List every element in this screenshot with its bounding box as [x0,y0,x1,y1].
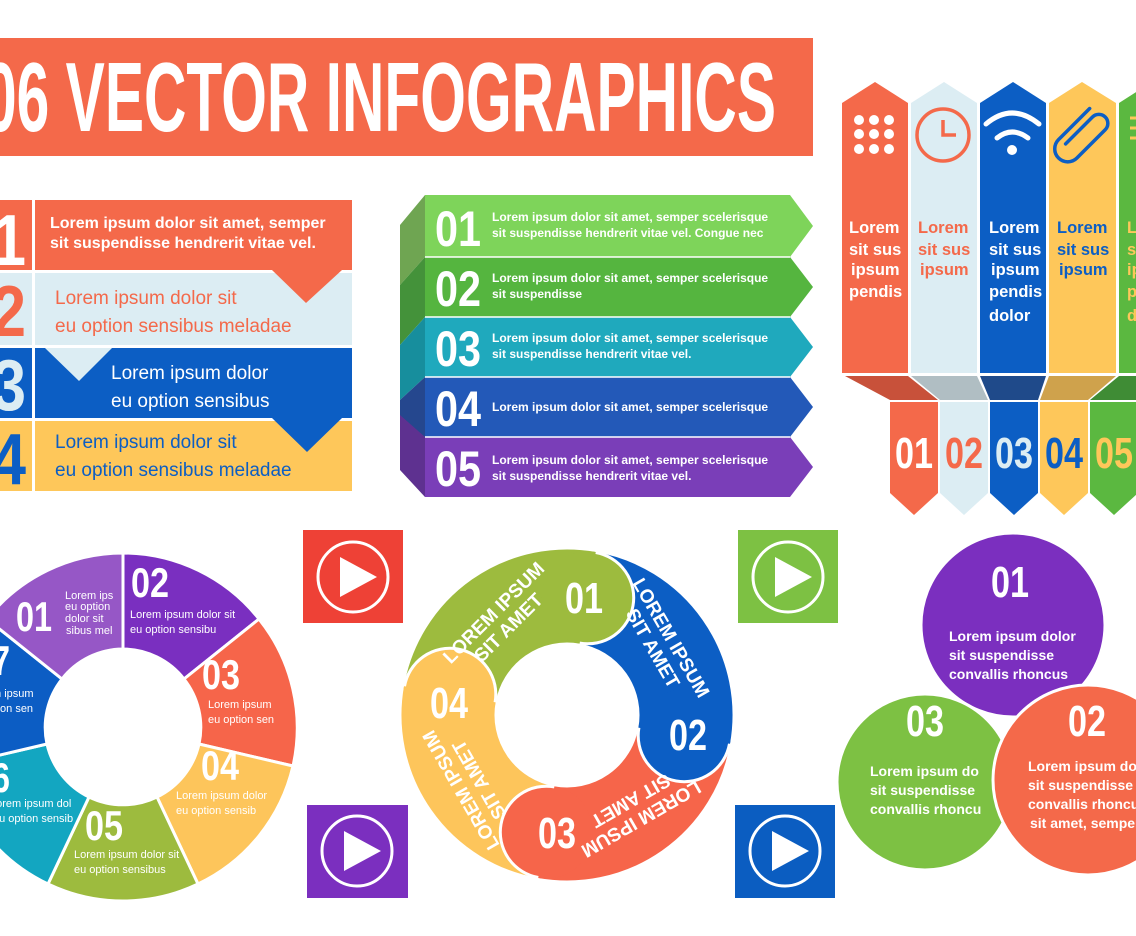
chart: swirl ring: LOREM IPSUM [419,726,504,853]
icon: play button red [303,530,403,623]
panel: vertical columns with icons: 03 [995,429,1033,478]
panel: vertical columns with icons: sit sus [849,241,901,259]
panel: vertical columns with icons: ipsum [1059,261,1108,279]
panel: 3D arrow list: sit suspendisse hendrerit vitae vel. [492,469,691,483]
chart: overlapping circles: sit suspendisse [870,782,975,798]
panel: vertical columns with icons: 01 [895,429,933,478]
chart: 7-segment donut: Lorem ipsum dolor sit [130,609,235,621]
panel: vertical columns with icons: 04 [1045,429,1083,478]
chart: 7-segment donut: sibus mel [66,625,112,637]
chart: overlapping circles: 02 [1068,697,1106,746]
chart: overlapping circles [837,533,1136,875]
chart: 7-segment donut [0,553,297,901]
icon: partial green [1130,118,1136,138]
panel: 3D arrow list: 01 [435,201,481,257]
panel: numbered list with pointers: Lorem ipsum dolor sit [55,288,237,309]
panel: numbered list with pointers: Lorem ipsum dolor [111,363,269,384]
chart: 7-segment donut: eu option [65,601,110,613]
chart: 7-segment donut: eu option sen [208,714,274,726]
panel: vertical columns with icons: Lorem [1057,219,1107,237]
chart: swirl ring: SIT AMET [621,605,683,692]
chart: overlapping circles: convallis rhoncus [949,666,1068,682]
panel: vertical columns with icons: ipsum [851,261,900,279]
chart: 7-segment donut: 02 [131,559,169,606]
chart: swirl ring: 04 [430,679,468,728]
panel: vertical columns with icons: ipsum [920,261,969,279]
panel: numbered list with pointers: Lorem ipsum dolor sit [55,432,237,453]
chart: swirl ring: 01 [565,574,603,623]
panel: vertical columns with icons: Lorem [849,219,899,237]
chart: overlapping circles: sit suspendisse [1028,777,1133,793]
panel: vertical columns with icons: pendis [849,283,902,301]
panel: 3D arrow list: Lorem ipsum dolor sit amet, semper scelerisque [492,331,768,345]
icon: paperclip [1049,105,1112,167]
chart: 7-segment donut: Lorem ips [65,590,114,602]
chart: 7-segment donut: Lorem ipsum [208,699,272,711]
panel: vertical columns with icons: Lorem [918,219,968,237]
icon: play button green [738,530,838,623]
panel: numbered list with pointers: sit suspendisse hendrerit vitae vel. [50,235,316,252]
chart: 7-segment donut: dolor sit [65,613,104,625]
icon: dots grid [854,115,894,154]
panel: 3D arrow list: Lorem ipsum dolor sit amet, semper scelerisque [492,400,768,414]
panel: numbered list with pointers: Lorem ipsum dolor sit amet, semper [50,215,326,232]
chart: overlapping circles: convallis rhoncu [870,801,981,817]
icon: play button blue [735,805,835,898]
chart: overlapping circles: Lorem ipsum do [870,763,979,779]
icon: play button purple [307,805,408,898]
panel: 3D arrow list: 04 [435,381,481,437]
chart: swirl ring [403,551,731,879]
panel: vertical columns with icons: Lorem [989,219,1039,237]
panel: 3D arrow list: Lorem ipsum dolor sit amet, semper scelerisque [492,453,768,467]
chart: overlapping circles: Lorem ipsum dolor [949,628,1076,644]
chart: 7-segment donut: eu option sensibus [74,864,166,876]
panel: vertical columns with icons: 02 [945,429,983,478]
panel: 3D arrow list [400,195,813,497]
icon: clock [917,109,969,161]
chart: overlapping circles: 01 [991,558,1029,607]
chart: 7-segment donut: eu option sensibu [130,624,216,636]
chart: 7-segment donut: 01 [16,593,52,640]
chart: swirl ring: SIT AMET [587,769,674,831]
panel: 3D arrow list: sit suspendisse hendrerit vitae vel. Congue nec [492,226,764,240]
panel: vertical columns with icons: sit sus [1057,241,1109,259]
icon: wifi [986,113,1039,138]
panel: 3D arrow list: 05 [435,441,481,497]
panel: numbered list with pointers: eu option sensibus [111,391,269,412]
panel: vertical columns with icons: sit sus [918,241,970,259]
chart: swirl ring: SIT AMET [471,589,548,667]
panel: 3D arrow list: Lorem ipsum dolor sit amet, semper scelerisque [492,271,768,285]
chart: swirl ring: LOREM IPSUM [628,575,713,702]
chart: 7-segment donut: 03 [202,651,240,698]
panel: vertical columns with icons: pendis [989,283,1042,301]
panel: 3D arrow list: sit suspendisse hendrerit vitae vel. [492,347,691,361]
chart: swirl ring: 03 [538,809,576,858]
chart: overlapping circles: sit suspendisse [949,647,1054,663]
chart: 7-segment donut: Lorem ipsum dolor sit [74,849,179,861]
chart: swirl ring: SIT AMET [449,736,511,823]
panel: numbered list with pointers: eu option sensibus meladae [55,460,292,481]
chart: 7-segment donut: eu option sensib [176,805,256,817]
chart: swirl ring: LOREM IPSUM [439,558,549,668]
panel: 3D arrow list: Lorem ipsum dolor sit amet, semper scelerisque [492,210,768,224]
chart: swirl ring: 02 [669,711,707,760]
panel: 3D arrow list: 02 [435,261,481,317]
panel: numbered list with pointers [0,200,352,500]
panel: 3D arrow list: 03 [435,321,481,377]
panel: 3D arrow list: sit suspendisse [492,287,582,301]
chart: 7-segment donut: 05 [85,802,123,849]
chart: swirl ring: LOREM IPSUM [577,776,704,861]
chart: 7-segment donut: Lorem ipsum dolor [176,790,267,802]
panel: vertical columns with icons: ipsum [991,261,1040,279]
chart: overlapping circles: 03 [906,697,944,746]
panel: vertical columns with icons: dolor [989,307,1031,325]
title banner [0,38,813,156]
panel: numbered list with pointers: eu option sensibus meladae [55,316,292,337]
chart: 7-segment donut: 04 [201,742,240,789]
panel: vertical columns with icons: sit sus [989,241,1041,259]
panel: vertical columns with icons [842,82,1136,515]
